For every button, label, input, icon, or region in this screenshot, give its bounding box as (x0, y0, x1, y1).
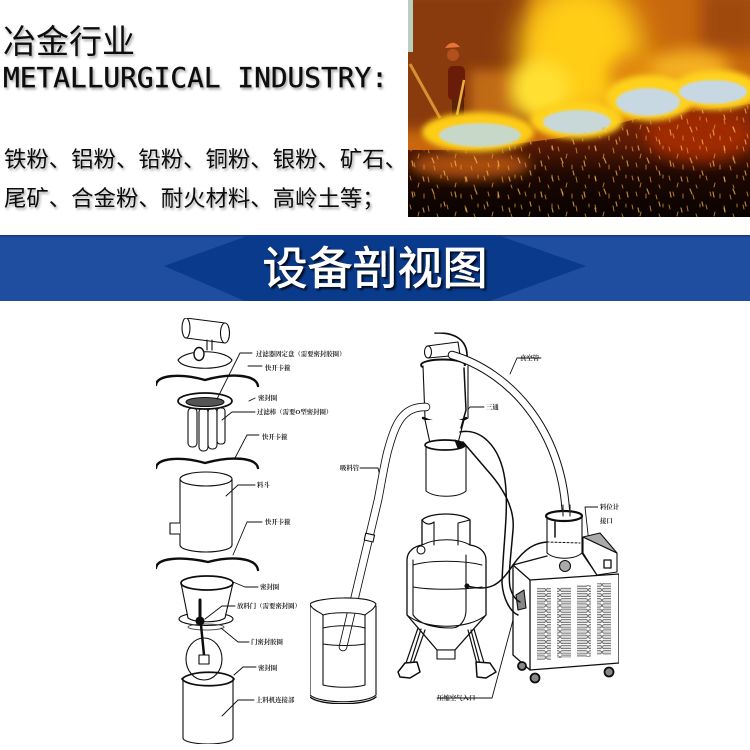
labels: parts callouts: 密封圈 (260, 582, 280, 591)
labels: parts callouts: 压缩空气入口 (437, 693, 475, 702)
heading: Chinese title: 冶金行业 (3, 23, 135, 60)
labels: parts callouts: 密封圈 (258, 663, 278, 672)
labels: parts callouts: 密封圈 (258, 393, 278, 402)
part: discharge funnel and door (179, 576, 233, 680)
part: vacuum pipe (452, 355, 566, 514)
labels: parts callouts: 放料门（需要密封圈） (237, 601, 301, 610)
icon: furnace worker (408, 0, 465, 118)
part: hopper body (170, 472, 232, 552)
labels: parts callouts: 过滤器固定盘（需要密封胶圈） (256, 349, 345, 358)
sparks (408, 104, 750, 217)
labels: parts callouts: 三通 (486, 402, 499, 411)
part: machine cabinet (513, 533, 619, 682)
photo: molten metal furnace with sparks (395, 0, 750, 217)
labels: parts callouts: 快开卡箍 (262, 432, 288, 441)
part: quick clamp 3 (156, 558, 258, 570)
text block: materials list (4, 147, 407, 211)
part: cabinet vents (537, 583, 611, 660)
labels: parts callouts: 真空管 (520, 353, 540, 362)
leader lines (205, 353, 598, 716)
labels: parts callouts: 料斗 (257, 480, 270, 489)
part: air hoses (460, 431, 580, 615)
part: filter plate and rods (178, 393, 232, 451)
labels: parts callouts: 接口 (600, 516, 613, 525)
labels: parts callouts: 快开卡箍 (265, 363, 291, 372)
part: suction pipe (343, 407, 426, 647)
part: source container (310, 598, 376, 704)
diagram: assembled vacuum feeder (310, 333, 619, 704)
labels: parts callouts: 快开卡箍 (265, 517, 291, 526)
part: loader connector cylinder (182, 672, 234, 744)
heading: English title: METALLURGICAL INDUSTRY: (3, 62, 388, 94)
labels: parts callouts: 门密封胶圈 (251, 637, 284, 646)
diagram: exploded view of hopper parts (156, 318, 598, 744)
title: metallurgical industry (3, 23, 388, 94)
part: level canister (546, 505, 582, 572)
lower dark spark field (408, 104, 750, 217)
part: storage tank (407, 514, 486, 659)
labels: parts callouts (237, 349, 620, 704)
part: quick clamp 2 (156, 459, 258, 468)
labels: parts callouts: 吸料管 (340, 463, 360, 472)
text block: materials list: 尾矿、合金粉、耐火材料、高岭土等； (4, 186, 385, 211)
banner diamond (164, 235, 586, 301)
part: quick clamp 1 (156, 376, 258, 386)
flames: glowing molten pools (422, 70, 750, 152)
text block: materials list: 铁粉、铝粉、铅粉、铜粉、银粉、矿石、 (4, 147, 407, 172)
part: receiver head (421, 333, 467, 370)
heading: equipment cross-section: 设备剖视图 (262, 243, 488, 294)
banner: section heading band (0, 235, 750, 301)
part: receiver body (423, 366, 468, 496)
part: tank legs (398, 628, 496, 678)
labels: parts callouts: 料位计 (600, 502, 620, 511)
labels: parts callouts: 过滤棒（需要O型密封圈） (257, 407, 332, 416)
part: filter head cylinder (178, 318, 232, 368)
labels: parts callouts: 上料机连接部 (256, 695, 295, 704)
